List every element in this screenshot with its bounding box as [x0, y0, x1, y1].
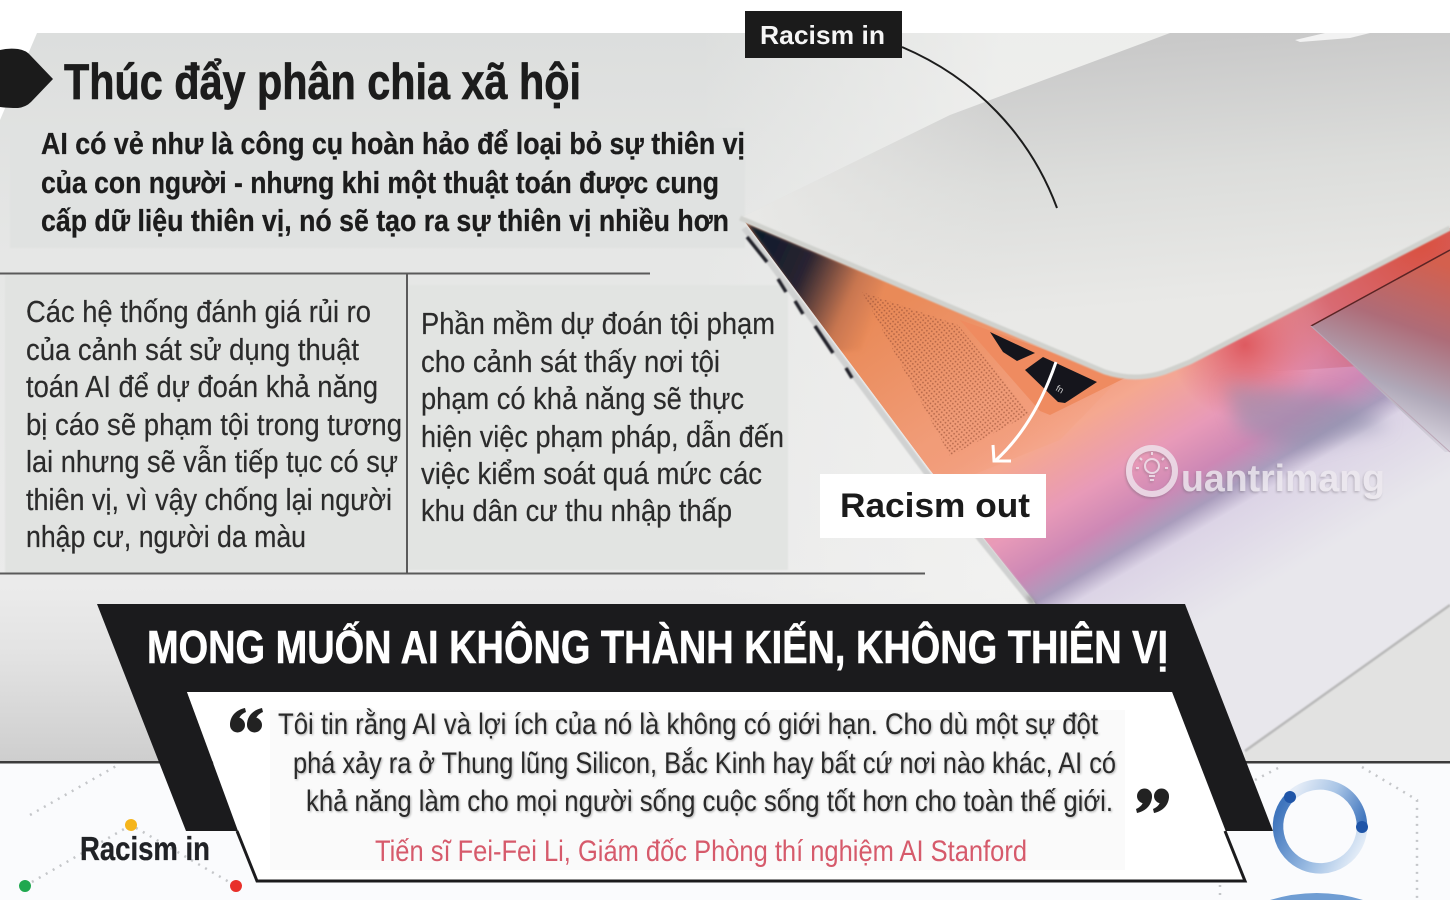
bottom background band [0, 761, 1450, 900]
intro text block: của con người - nhưng khi một thuật toán được cung [41, 165, 719, 200]
text block: right column: việc kiểm soát quá mức các [421, 456, 762, 491]
text block: right column: Phần mềm dự đoán tội phạm [421, 306, 775, 341]
text block: right column: khu dân cư thu nhập thấp [421, 493, 732, 528]
laptop base: fn [1054, 383, 1066, 395]
watermark: uantrimang [1181, 458, 1385, 500]
text block: right column: hiện việc phạm pháp, dẫn đến [421, 419, 784, 454]
watermark [1129, 448, 1385, 500]
icon: closing quote mark [1136, 788, 1169, 813]
quote text [278, 708, 1116, 818]
section marker icon [0, 49, 53, 108]
banner: heading and quote [97, 604, 1273, 881]
label: Racism in: Racism in [80, 830, 210, 867]
decorative network: right with ring [1220, 767, 1417, 900]
quote attribution: Tiến sĩ Fei-Fei Li, Giám đốc Phòng thí nghiệm AI Stanford [375, 835, 1027, 868]
quote text: khả năng làm cho mọi người sống cuộc sống tốt hơn cho toàn thế giới. [306, 785, 1113, 818]
text block: right column [421, 306, 784, 528]
laptop base [744, 222, 1450, 762]
icon: opening quote mark [230, 708, 263, 732]
quote white panel [187, 692, 1245, 881]
decorative network: left [19, 765, 242, 892]
text block: left column [26, 294, 402, 554]
tag: Racism out [820, 474, 1046, 538]
arrow: racism out curve [993, 362, 1056, 461]
arrow: racism in curve [902, 47, 1057, 208]
text block: left column: bị cáo sẽ phạm tội trong tương [26, 407, 402, 442]
text block: left column: của cảnh sát sử dụng thuật [26, 332, 359, 367]
quote text: Tôi tin rằng AI và lợi ích của nó là không có giới hạn. Cho dù một sự đột [278, 708, 1099, 741]
text block: left column: thiên vị, vì vậy chống lại người [26, 482, 392, 517]
laptop lid [740, 33, 1450, 378]
tag: Racism in [745, 11, 902, 58]
text block: left column: Các hệ thống đánh giá rủi ro [26, 294, 371, 329]
text block: left column: nhập cư, người da màu [26, 519, 306, 554]
tag: Racism out: Racism out [840, 487, 1030, 525]
text block: right column: cho cảnh sát thấy nơi tội [421, 344, 720, 379]
intro text block [41, 126, 745, 238]
tag: Racism in: Racism in [760, 20, 885, 50]
quote text: phá xảy ra ở Thung lũng Silicon, Bắc Kinh hay bất cứ nơi nào khác, AI có [293, 747, 1116, 780]
banner heading: MONG MUỐN AI KHÔNG THÀNH KIẾN, KHÔNG THIÊN VỊ [147, 621, 1168, 673]
column frame lines [0, 273, 925, 574]
intro text block: cấp dữ liệu thiên vị, nó sẽ tạo ra sự thiên vị nhiều hơn [41, 203, 729, 238]
heading: Thúc đẩy phân chia xã hội [64, 54, 581, 110]
banner black shape [97, 604, 1273, 831]
text block: left column: toán AI để dự đoán khả năng [26, 369, 378, 404]
text block: left column: lai nhưng sẽ vẫn tiếp tục có sự [26, 444, 398, 479]
text block: right column: phạm có khả năng sẽ thực [421, 381, 744, 416]
intro text block: AI có vẻ như là công cụ hoàn hảo để loại bỏ sự thiên vị [41, 126, 745, 161]
